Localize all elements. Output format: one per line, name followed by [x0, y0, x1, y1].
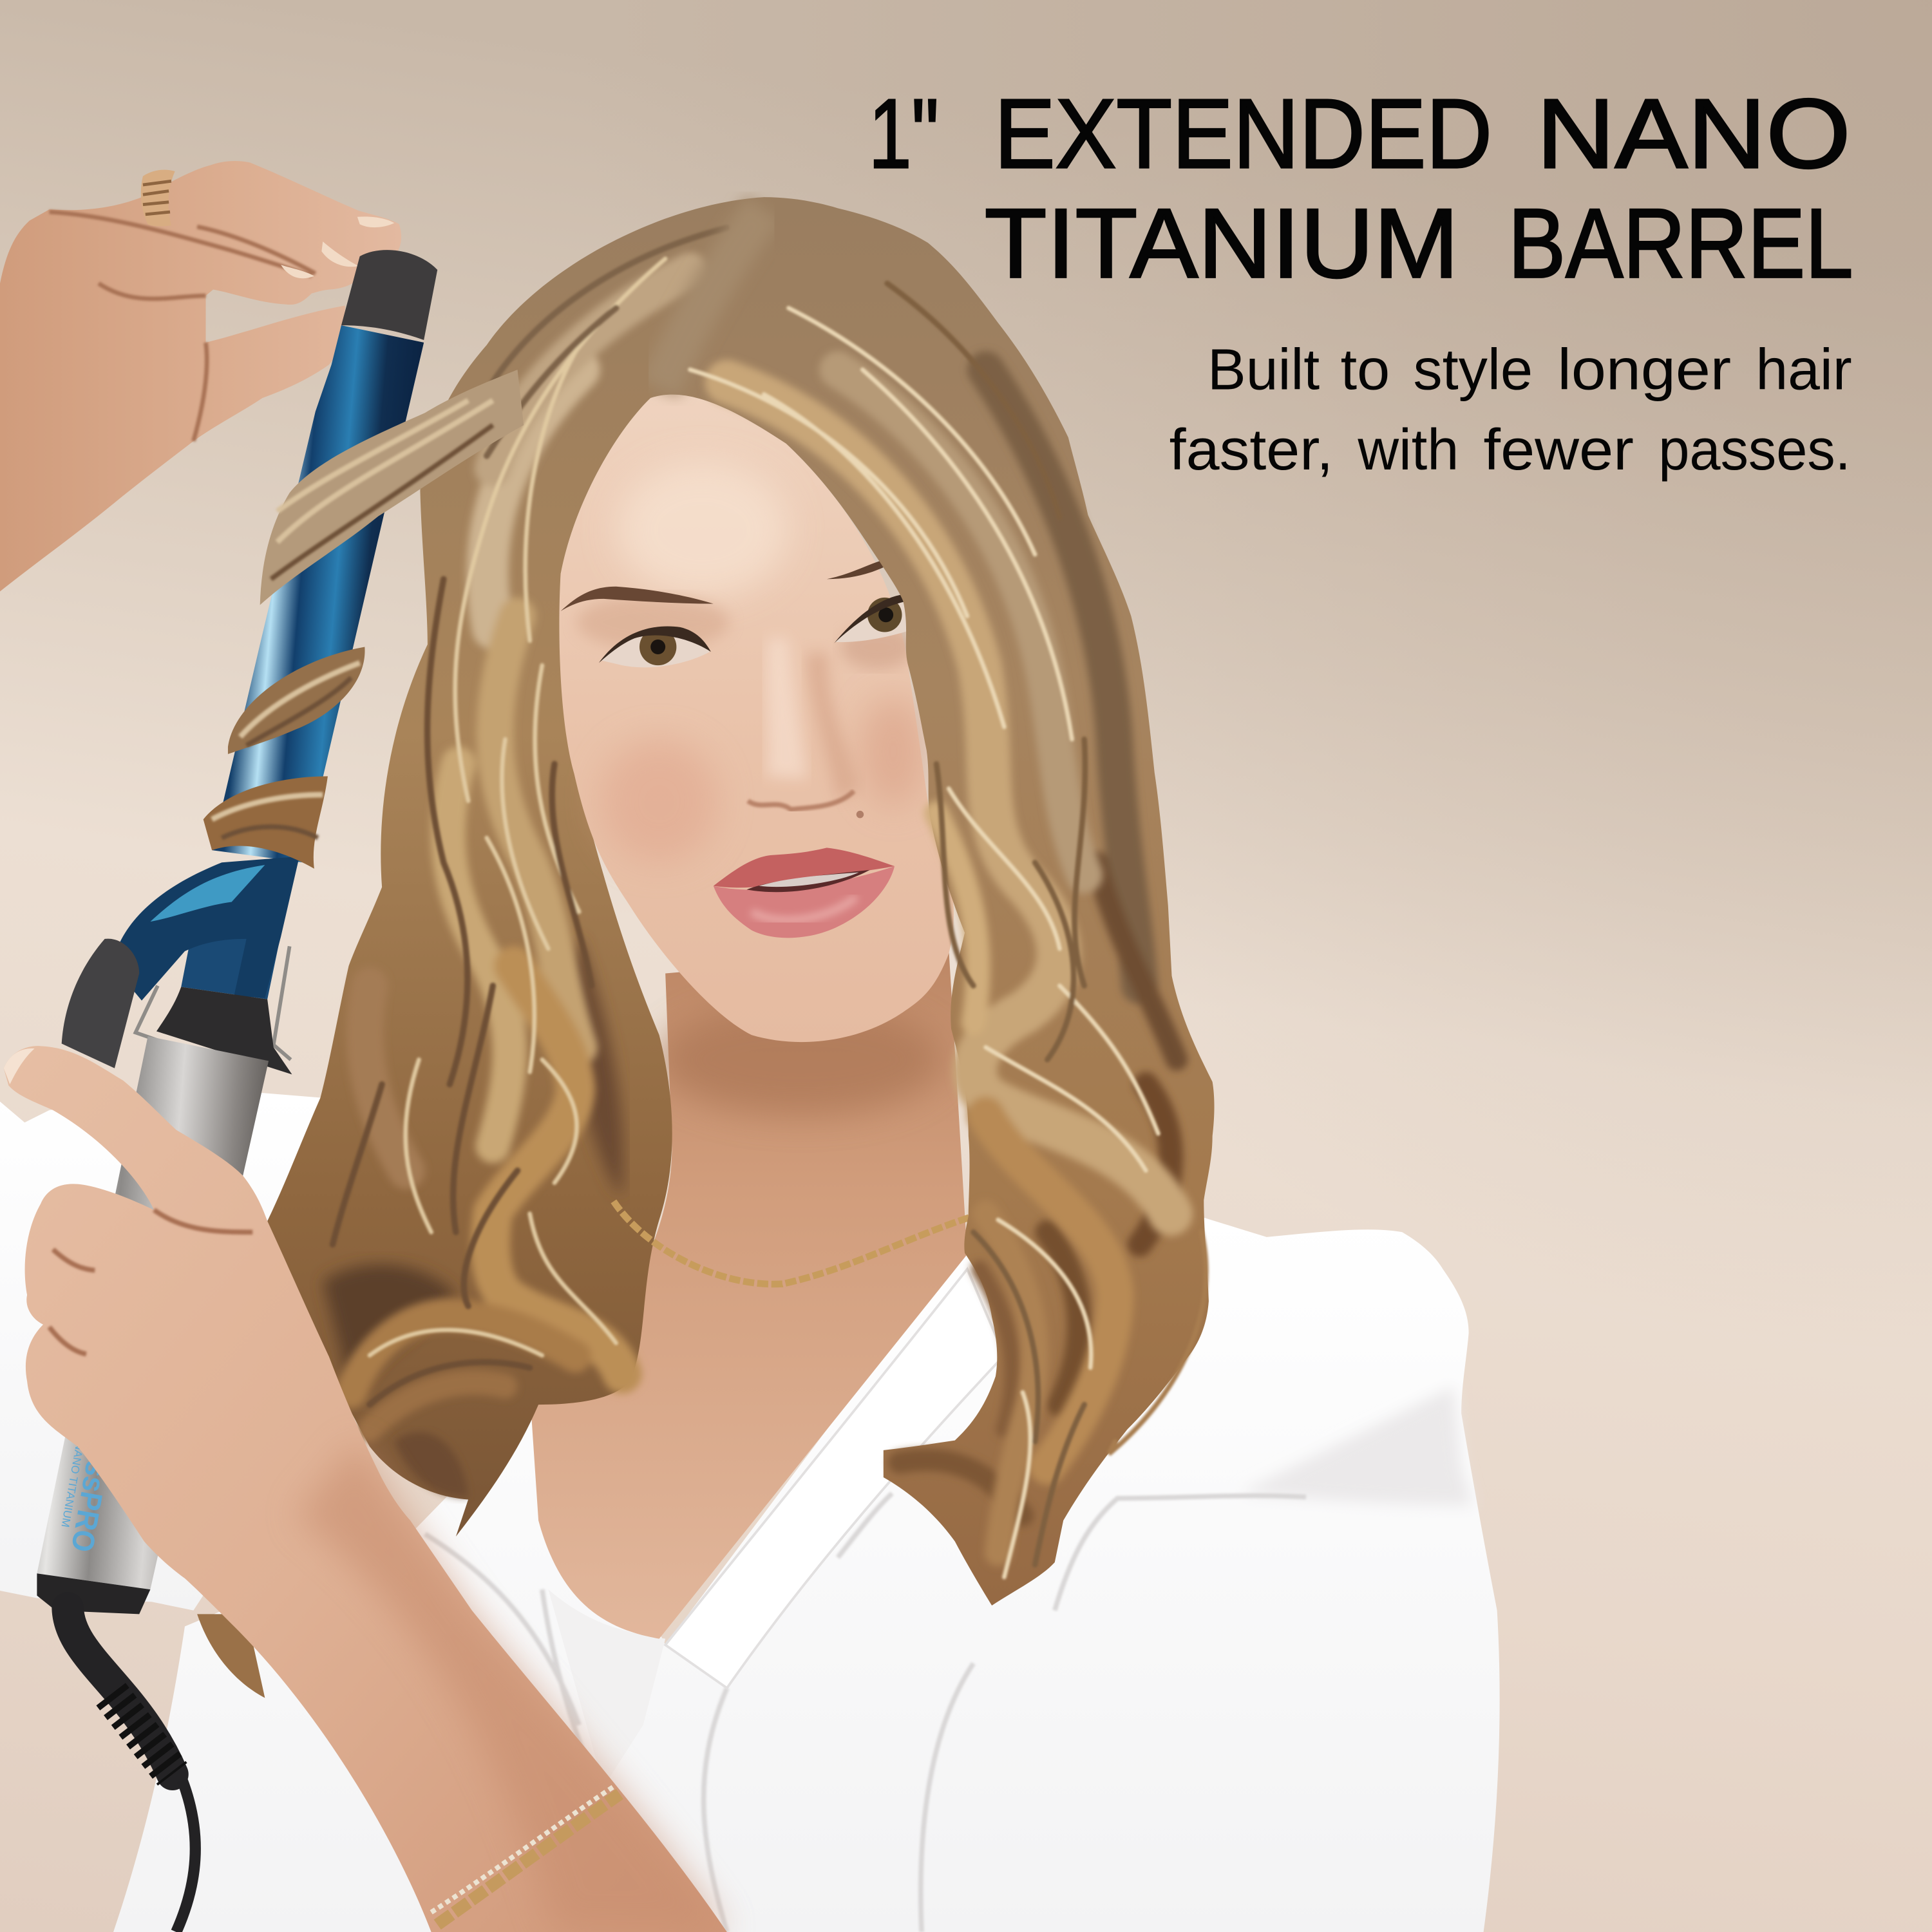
subheading: fewer [1484, 418, 1634, 482]
iron brand text: NANO TITANIUM [59, 1441, 86, 1528]
icon: right eye [834, 594, 908, 643]
photo: model [0, 197, 1500, 1932]
curl bands [351, 271, 690, 1429]
nose [748, 638, 860, 810]
lips [714, 848, 895, 938]
face [559, 395, 954, 1042]
finger creases [50, 1210, 252, 1354]
iron lower barrel [181, 862, 296, 999]
heading [869, 79, 1853, 298]
hair wrapped on barrel [204, 370, 524, 869]
iron barrel [212, 325, 424, 862]
tuft below arm [197, 1614, 265, 1698]
arm shading [296, 1442, 727, 1932]
icon: right eyebrow [827, 561, 885, 579]
iron collar [156, 987, 292, 1074]
subheading: to [1341, 338, 1390, 402]
thumbnail [4, 1048, 35, 1084]
parting blend [659, 209, 764, 388]
icon: left eye [599, 627, 711, 667]
heading: BARREL [1508, 188, 1853, 298]
iron clip [117, 857, 299, 1001]
lower hand and arm [4, 1046, 727, 1932]
hair: left side [197, 197, 862, 1698]
fine strands [333, 228, 727, 1405]
subheading: faster, [1170, 418, 1333, 482]
ring [141, 170, 175, 226]
hair: right lock [650, 197, 1215, 1605]
fingernails [281, 216, 394, 278]
icon: beauty mark [857, 811, 864, 818]
necklace [614, 1201, 970, 1284]
subheading [1170, 338, 1852, 482]
shirt [0, 1093, 1500, 1932]
subheading: with [1357, 418, 1459, 482]
subheading: style [1414, 338, 1533, 402]
right lock: fine strands [690, 283, 1206, 1577]
photo: curling iron [37, 250, 437, 1932]
iron handle [37, 1036, 269, 1589]
heading: 1" [869, 79, 939, 189]
iron wire stand [135, 946, 291, 1059]
iron base cap [37, 1573, 150, 1614]
subheading: longer [1557, 338, 1731, 402]
subheading: Built [1208, 338, 1320, 402]
finger creases [50, 212, 316, 441]
neck and chest [530, 949, 967, 1639]
iron thumb lever [62, 939, 139, 1068]
iron cap [341, 250, 437, 340]
right lock: shadows [900, 370, 1177, 1515]
bracelet [431, 1786, 620, 1925]
dark undertone: under curls [323, 1264, 456, 1392]
top hand [0, 161, 401, 591]
power cord [68, 1608, 195, 1932]
icon: left eyebrow [561, 587, 714, 611]
heading: EXTENDED [994, 79, 1492, 189]
iron brand text: BaBylissPRO [64, 1372, 129, 1555]
heading: TITANIUM [985, 188, 1459, 298]
heading: NANO [1537, 79, 1851, 189]
subheading: hair [1756, 338, 1852, 402]
subheading: passes. [1658, 418, 1851, 482]
right lock: light bands [727, 370, 1171, 1553]
